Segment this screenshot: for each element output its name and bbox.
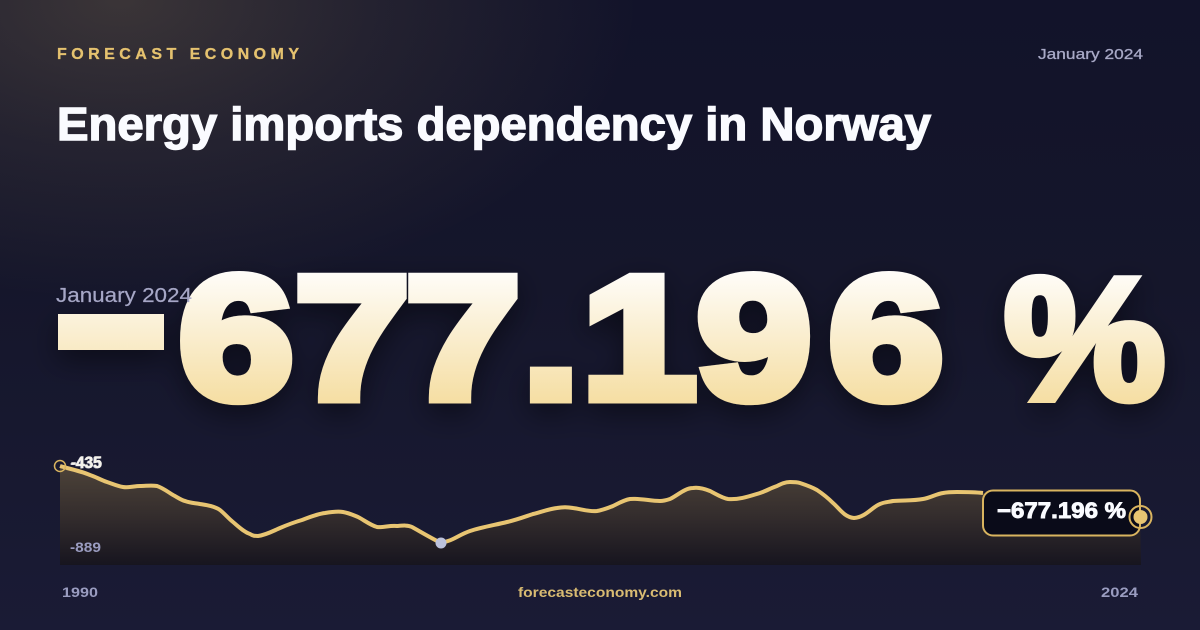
value pill	[983, 490, 1140, 536]
x axis start year: 1990	[62, 584, 98, 600]
date over value: January 2024	[56, 285, 192, 307]
min label: -889	[70, 539, 101, 555]
chart area	[60, 466, 1141, 565]
title: Energy imports dependency in Norway	[57, 98, 931, 150]
max label: -435	[71, 453, 102, 472]
date top right: January 2024	[1038, 46, 1143, 63]
low point marker	[436, 538, 446, 548]
max label: -435	[70, 454, 101, 472]
value pill: −677.196 %	[997, 498, 1126, 523]
end marker	[1130, 506, 1152, 528]
chart line	[60, 466, 983, 543]
brand label: FORECAST ECONOMY	[57, 46, 299, 63]
big value	[58, 241, 1165, 436]
big value: 677.196	[179, 242, 943, 435]
big value: %	[1004, 241, 1165, 436]
sparkline chart	[54, 453, 1152, 565]
x axis end year: 2024	[1101, 584, 1138, 600]
start marker	[54, 460, 66, 472]
source url: forecasteconomy.com	[518, 584, 682, 600]
